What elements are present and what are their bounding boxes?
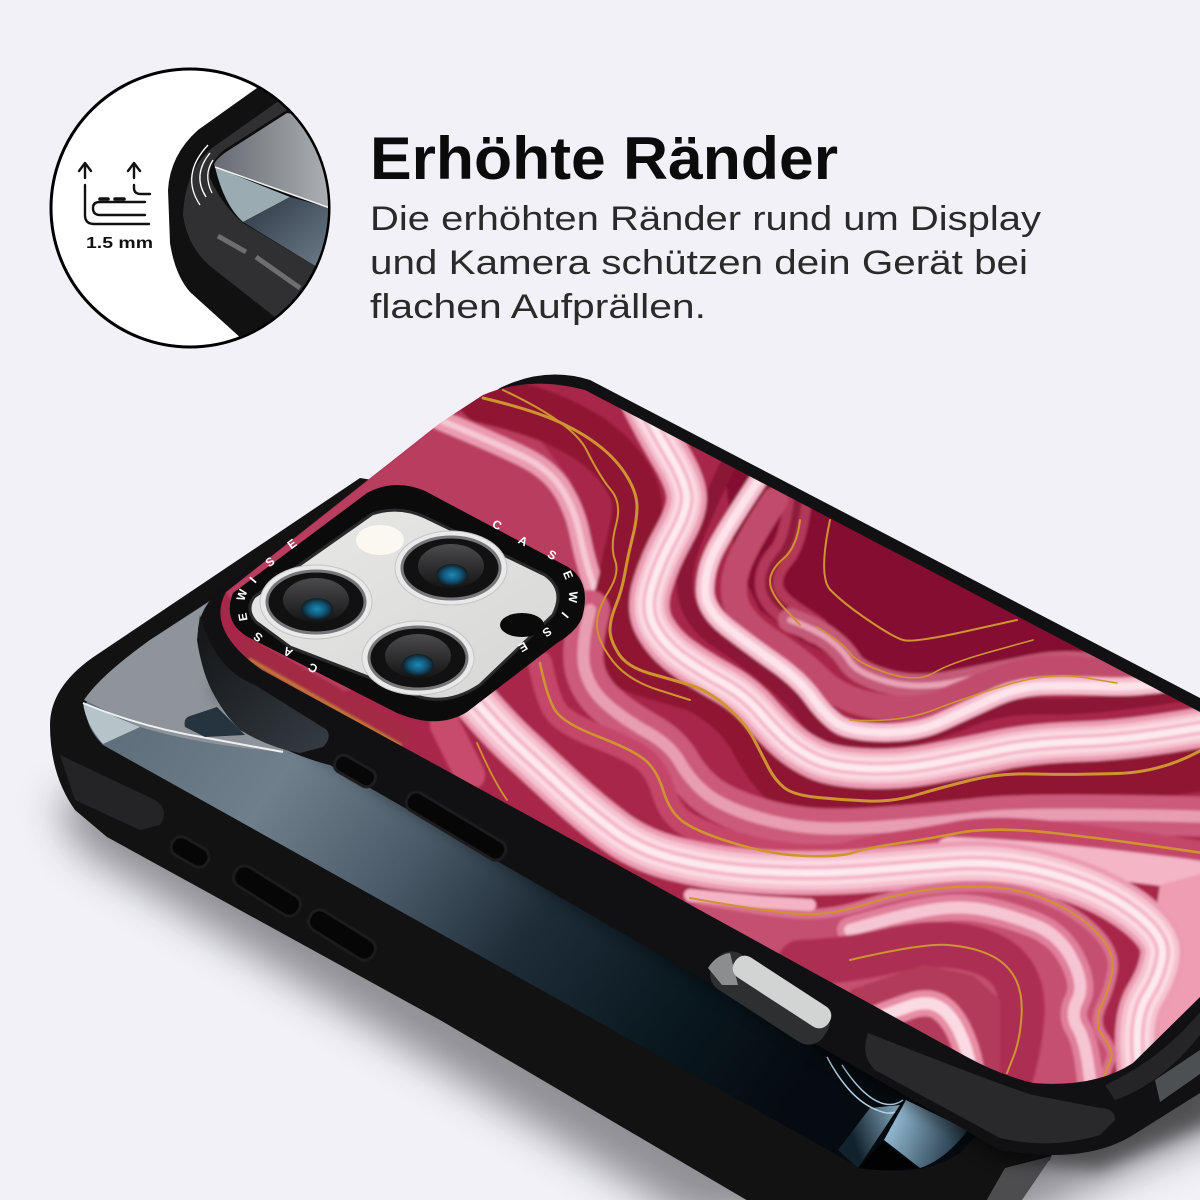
blue screen reflection lobe right [884,1100,968,1168]
description text: flachen Aufprällen. [370,288,706,326]
flash [356,525,404,555]
ring lettering: E [285,536,299,552]
lower rim highlight [1105,1012,1200,1100]
zoomed case corner [168,88,328,336]
silver port button [703,944,837,1052]
lens three [362,621,474,695]
right edge port [1155,1050,1200,1102]
ring lettering: C [490,517,504,533]
title: Erhöhte Ränder [370,125,838,192]
lens one [260,565,372,639]
black triangle on screen [858,1142,918,1170]
ring lettering: E [560,569,576,581]
blue screen reflection lobe left [838,1105,900,1168]
lidar sensor [500,613,544,637]
camera glass plate [250,510,558,699]
front phone case [180,370,1200,1155]
drop shadow under phones [55,700,1200,1200]
ring lettering: C [306,660,320,676]
description text [370,200,1041,326]
impact arcs [192,145,213,205]
corner bumper on back phone [60,755,164,830]
zoomed screen [214,113,330,208]
camera ring [230,485,585,721]
light wedge on screen [83,703,140,744]
agate colour bands [180,370,1200,1100]
back phone volume down button [305,906,379,964]
ring lettering: E [516,639,530,655]
silver frame edge [985,1156,1052,1200]
ring lettering: S [540,624,554,640]
icon label: 1.5 mm [86,235,153,252]
ring lettering: W [234,587,251,603]
front phone case body [198,375,1200,1155]
shadow cast by front phone [210,420,1200,1170]
ring lettering: S [545,547,559,563]
camera bump [230,485,585,721]
back phone small button [168,833,212,871]
upper screen reflection [84,582,300,752]
ring lettering: I [559,609,571,621]
back phone screen [86,512,1010,1171]
gold veins [477,390,1200,1085]
ring lettering: A [516,533,530,549]
ring lettering: S [263,554,277,570]
lens two [395,531,507,605]
white curve on screen [83,703,283,752]
back phone case body [50,478,1100,1200]
left camera-side bumper [197,615,329,753]
long side button [403,789,509,863]
ring lettering: E [235,612,251,622]
highlight strip [218,236,300,288]
back phone with clear case [50,478,1100,1200]
ring lettering: S [251,629,265,645]
back phone volume up button [230,862,304,920]
description text: und Kamera schützen dein Gerät bei [370,244,1028,282]
ring lettering: I [247,574,259,586]
description text: Die erhöhten Ränder rund um Display [370,200,1041,238]
dark notch on screen [185,707,245,737]
agate artwork [180,370,1200,1100]
mute switch [331,752,379,790]
ring lettering: A [281,644,295,660]
reflection arcs [827,1057,903,1113]
right lower corner bumper [865,1033,1115,1143]
edge height icon [79,163,150,224]
ring lettering [234,517,580,676]
ring lettering: W [565,591,580,604]
detail circle [51,69,345,347]
